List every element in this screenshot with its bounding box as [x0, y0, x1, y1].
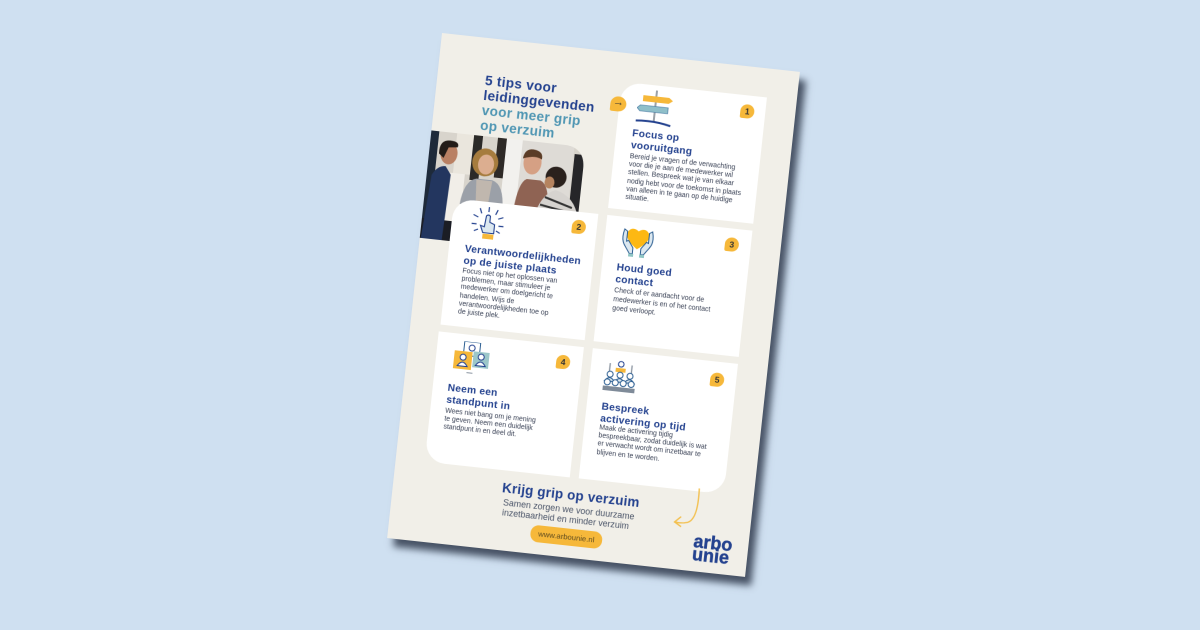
body text: nodig hebt voor de toekomst in plaats	[627, 177, 741, 197]
man left	[421, 164, 452, 240]
body text: situatie.	[625, 194, 649, 203]
icon: pointing hand	[472, 207, 504, 240]
body text: bespreekbaar, zodat duidelijk is wat	[598, 432, 707, 451]
number 5: 5	[714, 375, 720, 385]
card 5: bespreek activering	[579, 348, 738, 494]
heading: Neem een	[447, 383, 498, 399]
card 3: houd goed contact	[594, 215, 752, 357]
body text: voor die je aan de medewerker wil	[628, 161, 733, 179]
card 4: neem een standpunt in	[425, 331, 584, 477]
heading	[600, 401, 686, 433]
icon: hands with heart	[622, 228, 654, 258]
heading: op de juiste plaats	[463, 256, 557, 277]
number 4	[555, 354, 571, 370]
woman blazer	[460, 178, 503, 204]
body text: Focus niet op het oplossen van	[462, 268, 558, 285]
flyer page	[387, 33, 800, 577]
number 5	[709, 372, 725, 387]
man brown sweater	[514, 179, 548, 208]
body text	[612, 287, 711, 316]
footer text: inzetbaarheid en minder verzuim	[502, 507, 630, 531]
icon: group of people	[602, 360, 636, 394]
title: op verzuim	[479, 118, 555, 141]
footer text: Samen zorgen we voor duurzame	[503, 497, 635, 521]
website button	[530, 525, 603, 549]
body text: handelen. Wijs de	[459, 292, 515, 305]
arrow: to website	[674, 488, 700, 528]
arrow bubble	[610, 96, 627, 112]
number 2: 2	[576, 222, 582, 232]
heading: activering op tijd	[600, 413, 686, 433]
number 1: 1	[744, 106, 750, 117]
body text: verantwoordelijkheden toe op	[458, 300, 549, 317]
icon: speech bubbles with people	[452, 341, 490, 374]
body text: stellen. Bespreek wat je van elkaar	[628, 169, 734, 188]
footer heading: Krijg grip op verzuim	[501, 480, 640, 510]
heading: contact	[615, 274, 654, 289]
heading: Bespreek	[601, 401, 650, 417]
title: 5 tips voor	[484, 73, 558, 96]
number 1	[740, 104, 755, 119]
body text: te geven. Neem een duidelijk	[444, 416, 533, 432]
body text: goed verloopt.	[612, 305, 656, 316]
body text: de juiste plek.	[458, 308, 500, 320]
body text	[443, 408, 536, 439]
body text: medewerker is en of het contact	[613, 296, 711, 313]
number 4: 4	[560, 357, 566, 367]
heading: standpunt in	[446, 395, 511, 413]
card 2: verantwoordelijkheden	[441, 198, 598, 340]
body text: medewerker om doelgericht te	[460, 284, 553, 301]
logo: unie	[691, 544, 730, 568]
body text: blijven en te worden.	[596, 449, 660, 463]
body text: er verwacht wordt om inzetbaar te	[597, 441, 701, 459]
body text: standpunt in en deel dit.	[443, 424, 517, 439]
number 3: 3	[729, 239, 735, 250]
body text: Maak de activering tijdig	[599, 424, 673, 439]
heading: vooruitgang	[630, 140, 693, 158]
heading	[630, 128, 693, 158]
title: voor meer grip	[481, 103, 582, 128]
body text: Wees niet bang om je mening	[445, 408, 536, 424]
title	[479, 73, 595, 141]
arrow bubble: →	[612, 96, 625, 109]
heading: Houd goed	[616, 262, 672, 279]
number 3	[724, 237, 740, 252]
icon: signpost	[636, 90, 673, 128]
heading: Verantwoordelijkheden	[464, 244, 581, 267]
body text	[458, 268, 558, 320]
woman striped	[537, 194, 576, 212]
website button: www.arbounie.nl	[538, 529, 595, 544]
heading: Focus op	[632, 128, 680, 144]
number 2	[571, 219, 587, 235]
title: leidinggevenden	[483, 88, 595, 115]
body text: van alleen in te gaan op de huidige	[626, 186, 733, 204]
team photo	[420, 130, 584, 241]
body text: Check of er aandacht voor de	[614, 287, 704, 304]
body text	[596, 424, 707, 463]
heading	[615, 262, 672, 289]
logo: arbo	[693, 531, 734, 555]
card 1: focus op vooruitgang	[608, 82, 767, 224]
body text: problemen, maar stimuleer je	[461, 276, 551, 292]
heading	[446, 383, 511, 413]
logo	[691, 531, 734, 568]
body text	[625, 153, 741, 204]
body text: Bereid je vragen of de verwachting	[629, 153, 736, 171]
